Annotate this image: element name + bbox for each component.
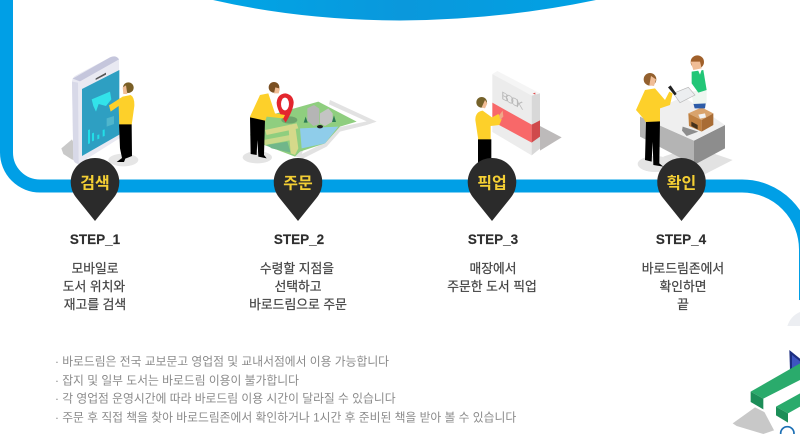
pin: 픽업: 픽업 xyxy=(477,174,507,192)
step 1 text: STEP_1 xyxy=(70,232,121,247)
step 4 text: 확인하면 xyxy=(659,279,707,294)
step 2 text: 수령할 지점을 xyxy=(260,261,334,276)
step 2 text: STEP_2 xyxy=(274,232,324,247)
top blue banner curve xyxy=(213,0,596,20)
pin: 주문: 주문 xyxy=(283,176,313,192)
step 4 text: STEP_4 xyxy=(656,232,707,247)
pin: 확인 xyxy=(657,158,706,221)
step 1 text: 도서 위치와 xyxy=(63,279,125,294)
step 4 text xyxy=(642,232,724,312)
icon: person using phone xyxy=(61,56,138,166)
step 3 text: STEP_3 xyxy=(468,232,519,247)
notes list: · 각 영업점 운영시간에 따라 바로드림 이용 시간이 달라질 수 있습니다 xyxy=(55,392,396,406)
pin: 픽업 xyxy=(468,158,516,221)
notes list: · 바로드림은 전국 교보문고 영업점 및 교내서점에서 이용 가능합니다 xyxy=(55,354,389,368)
step 1 text xyxy=(63,232,126,312)
step 1 text: 재고를 검색 xyxy=(64,297,126,312)
notes list: · 주문 후 직접 책을 찾아 바로드림존에서 확인하거나 1시간 후 준비된 책을 받아 볼 수 있습니다 xyxy=(55,410,516,424)
step 3 text: 주문한 도서 픽업 xyxy=(447,279,537,294)
step 1 text: 모바일로 xyxy=(71,261,119,276)
pin: 검색 xyxy=(71,158,119,221)
icon: person picking up book xyxy=(475,71,562,163)
step 2 text: 선택하고 xyxy=(274,279,322,294)
step 2 text xyxy=(249,232,347,312)
pin: 검색: 검색 xyxy=(80,174,110,192)
icon: person placing map pin xyxy=(243,82,377,163)
step 4 text: 끝 xyxy=(677,297,689,312)
step 3 text: 매장에서 xyxy=(469,261,517,276)
bottom-right decoration xyxy=(733,312,800,434)
pin: 주문 xyxy=(274,158,322,221)
step 3 text xyxy=(447,232,537,294)
icon: counter pickup confirmation xyxy=(636,55,733,175)
step 4 text: 바로드림존에서 xyxy=(642,261,724,276)
blue timeline path xyxy=(6,0,800,300)
icon: person picking up book: BOOK xyxy=(501,89,524,113)
notes list xyxy=(55,354,516,424)
notes list: · 잡지 및 일부 도서는 바로드림 이용이 불가합니다 xyxy=(55,374,299,388)
pin: 확인: 확인 xyxy=(667,174,696,192)
step 2 text: 바로드림으로 주문 xyxy=(249,297,347,312)
